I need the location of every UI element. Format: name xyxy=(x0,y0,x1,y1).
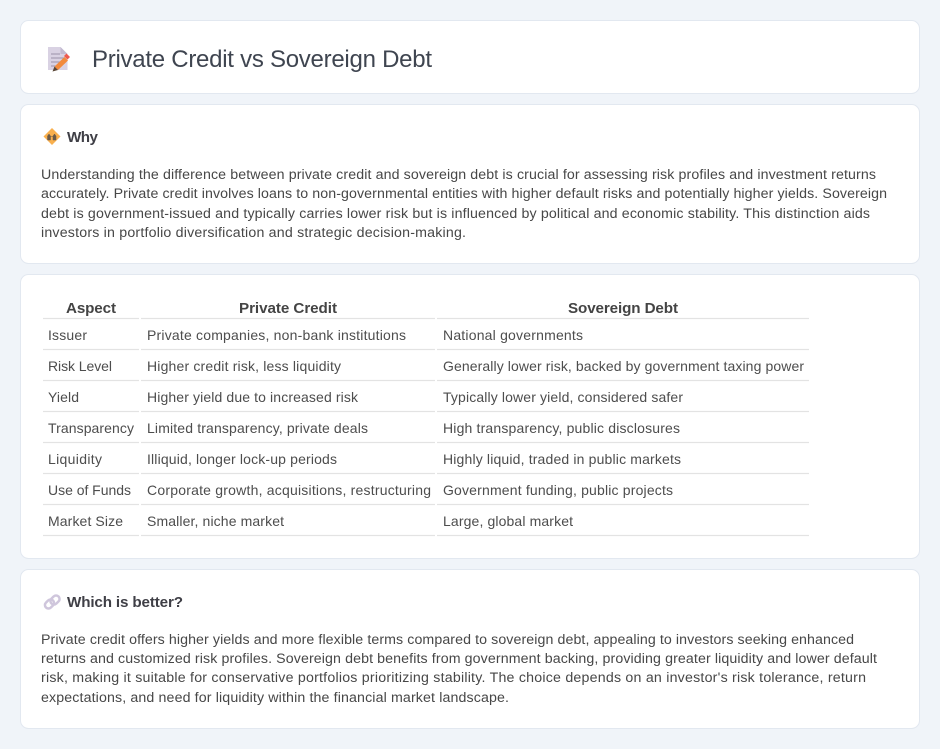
row: liquidity: Highly liquid, traded in public markets xyxy=(443,451,681,467)
table header: Sovereign Debt xyxy=(568,300,678,317)
heading: which is better: Which is better? xyxy=(67,594,183,611)
table header: Private Credit xyxy=(239,300,337,317)
row: market size: Large, global market xyxy=(443,513,573,529)
row: transparency: High transparency, public disclosures xyxy=(443,420,680,436)
text block: which is better xyxy=(41,632,877,706)
table header xyxy=(66,300,678,317)
row: use of funds: Use of Funds xyxy=(48,482,131,498)
icon: document with pencil xyxy=(48,47,70,72)
row: yield: Typically lower yield, considered safer xyxy=(443,389,683,405)
text block: which is better: Private credit offers higher yields and more flexible terms compared to sovereign debt, appealing to investors seeking enhanced xyxy=(41,632,854,648)
text block: which is better: risk, making it suitable for conservative portfolios prioritizing stability. The choice depends on an investor's risk tolerance, return xyxy=(41,670,866,686)
text block: which is better: returns and customized risk profiles. Sovereign debt benefits from government backing, providing greater liquidity and lower default xyxy=(41,651,877,667)
row: liquidity xyxy=(48,451,681,467)
row: use of funds xyxy=(48,482,673,498)
row: risk level: Risk Level xyxy=(48,358,112,374)
row: transparency: Transparency xyxy=(48,420,134,436)
row: liquidity: Liquidity xyxy=(48,451,102,467)
panel: comparison table xyxy=(20,274,920,558)
row: risk level xyxy=(48,358,804,374)
row: risk level: Generally lower risk, backed by government taxing power xyxy=(443,358,804,374)
row: issuer: Issuer xyxy=(48,327,87,343)
row: liquidity: Illiquid, longer lock-up periods xyxy=(147,451,337,467)
row: yield: Higher yield due to increased risk xyxy=(147,389,359,405)
header panel xyxy=(20,20,920,94)
row: yield xyxy=(48,389,683,405)
table header: Aspect xyxy=(66,300,116,317)
row: use of funds: Corporate growth, acquisitions, restructuring xyxy=(147,482,431,498)
panel: which is better xyxy=(20,570,920,728)
text block: why: accurately. Private credit involves loans to non-governmental entities with higher default risks and potentially higher yields. Sovereign xyxy=(41,186,887,202)
row: issuer xyxy=(48,327,583,343)
row: market size xyxy=(48,513,573,529)
panel: why xyxy=(20,104,920,264)
icon: chain link xyxy=(43,594,61,610)
row: transparency xyxy=(48,420,680,436)
row: risk level: Higher credit risk, less liquidity xyxy=(147,358,341,374)
row: use of funds: Government funding, public projects xyxy=(443,482,673,498)
row: issuer: Private companies, non-bank institutions xyxy=(147,327,406,343)
text block: why xyxy=(41,167,887,241)
icon: diamond warning sign xyxy=(44,128,60,145)
heading: why: Why xyxy=(67,129,99,146)
title: Private Credit vs Sovereign Debt xyxy=(92,46,432,73)
row: transparency: Limited transparency, private deals xyxy=(147,420,368,436)
row: market size: Market Size xyxy=(48,513,123,529)
row: yield: Yield xyxy=(48,389,79,405)
text block: why: Understanding the difference between private credit and sovereign debt is crucial for assessing risk profiles and investment returns xyxy=(41,167,876,183)
text block: why: debt is government-issued and typically carries lower risk but is influenced by political and economic stability. This distinction aids xyxy=(41,206,870,222)
text block: which is better: expectations, and need for liquidity within the financial market landscape. xyxy=(41,690,509,706)
row: market size: Smaller, niche market xyxy=(147,513,284,529)
text block: why: investors in portfolio diversification and strategic decision-making. xyxy=(41,225,466,241)
row: issuer: National governments xyxy=(443,327,583,343)
